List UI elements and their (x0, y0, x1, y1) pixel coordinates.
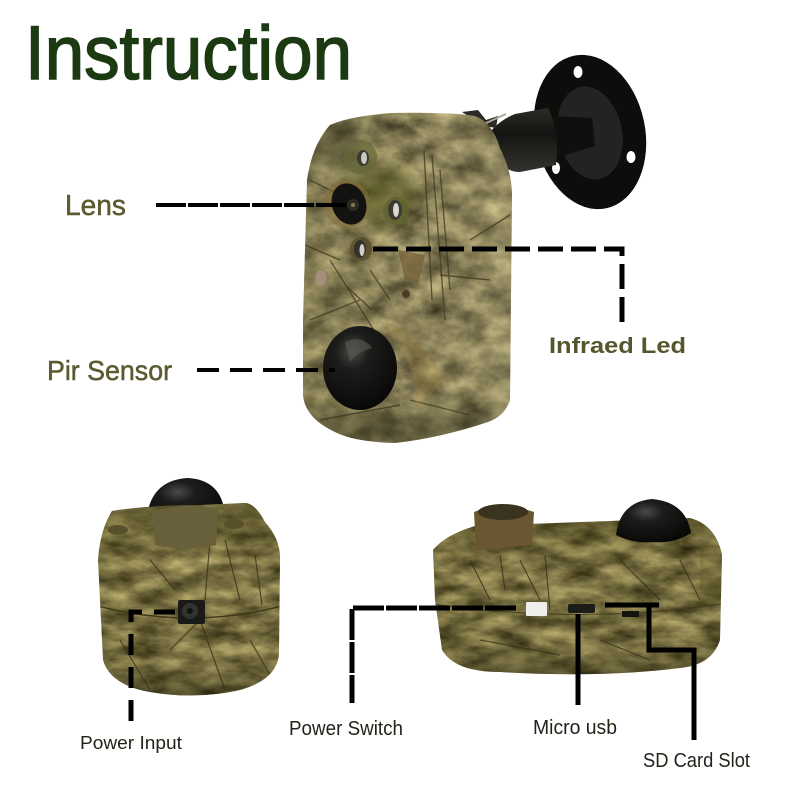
label: micro usb: Micro usb (533, 717, 617, 739)
leader line: infrared LED (373, 249, 622, 327)
mount disk (520, 44, 660, 220)
camera underside view: ports (430, 499, 725, 680)
leader line: SD card slot (605, 605, 694, 740)
lens post (474, 504, 534, 550)
dome top (146, 478, 225, 525)
leader line: power input (131, 612, 175, 725)
power switch (526, 602, 547, 616)
camera side view: power input (95, 478, 285, 700)
power jack (178, 600, 205, 624)
micro usb port (568, 604, 595, 613)
label: power input: Power Input (80, 733, 182, 753)
leader line: lens (156, 203, 347, 207)
title: Instruction (25, 11, 352, 96)
infrared LEDs (316, 140, 410, 298)
label: SD card slot: SD Card Slot (643, 750, 750, 772)
lens (324, 178, 372, 230)
leader line: power switch (352, 608, 516, 703)
lens post (152, 505, 218, 548)
label: infrared LED: Infraed Led (549, 333, 686, 358)
camera front view (303, 112, 512, 443)
label: lens: Lens (65, 190, 126, 222)
mount arm (462, 108, 595, 172)
SD card slot (622, 611, 639, 617)
housing (430, 510, 725, 680)
wall mount bracket (462, 44, 660, 220)
leader line: PIR sensor (197, 368, 335, 372)
PIR sensor dome (323, 326, 397, 410)
label: power switch: Power Switch (289, 718, 403, 740)
label: PIR sensor: Pir Sensor (47, 355, 172, 386)
camouflage housing (303, 112, 512, 443)
dome (616, 499, 691, 542)
leader line: micro usb (576, 614, 580, 705)
housing (95, 500, 285, 700)
